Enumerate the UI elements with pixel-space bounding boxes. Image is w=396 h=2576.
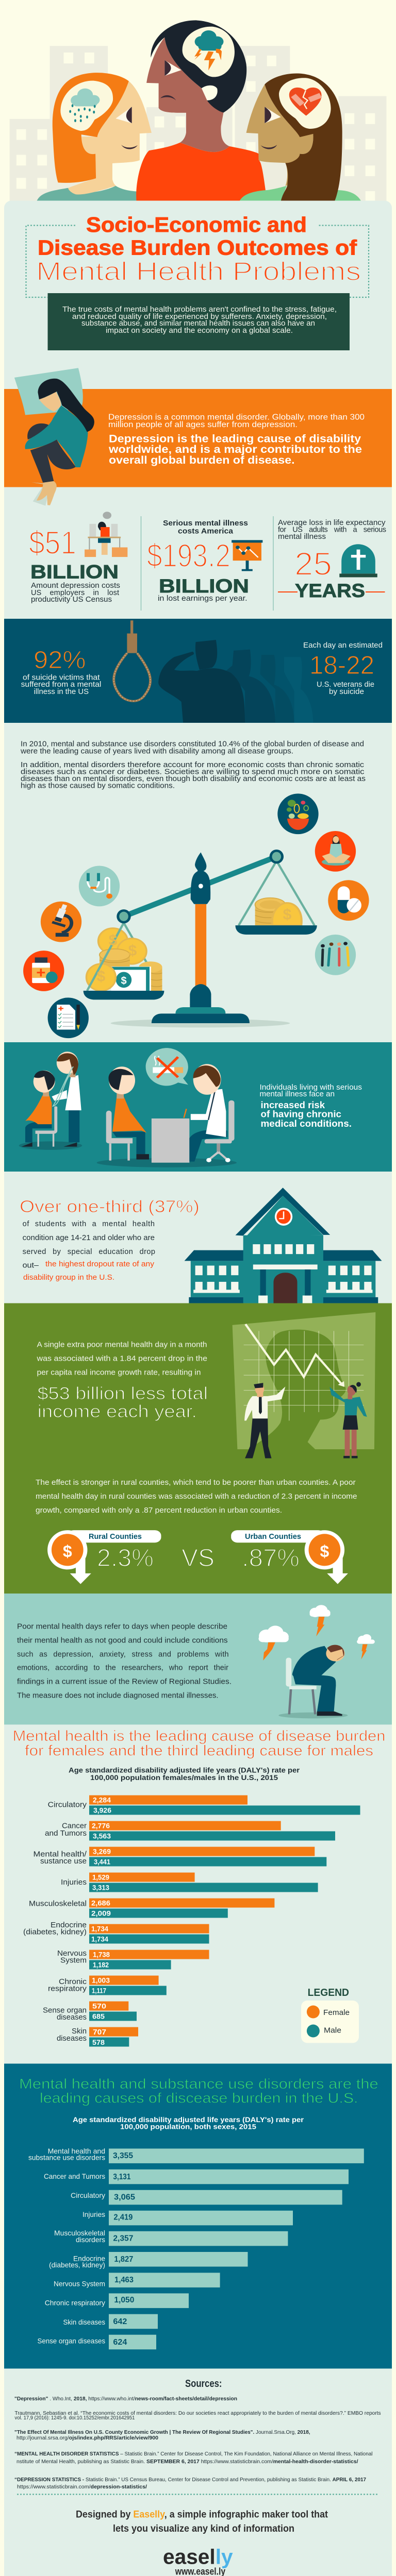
bar chart: DALYs by sex: Sense organ	[43, 2006, 87, 2014]
stat: 51 billion: Amount depression costs	[31, 582, 120, 590]
text block: global burden of disease: In 2010, mental and substance use disorders constituted 10.4% of the global burden of disease and	[21, 740, 364, 748]
depression text: Depression is the leading cause of disability	[109, 433, 361, 445]
poor mental health days text: such as depression, anxiety, stress and problems with	[17, 1651, 229, 1659]
stat: 25 years: 25	[294, 546, 332, 582]
chronic conditions band	[4, 1042, 392, 1172]
stat: 92 percent: of suicide victims that	[23, 673, 100, 682]
stat: 18-22 veterans: by suicide	[329, 687, 364, 696]
person: woman with brown hair	[239, 74, 361, 201]
rural urban text	[36, 1479, 357, 1515]
illustration: saluting soldier silhouettes	[158, 640, 313, 723]
bar chart: DALYs by sex: 570	[92, 2002, 106, 2010]
scale beam and post	[124, 852, 276, 1005]
stat: 193.2 billion: costs America	[178, 527, 234, 536]
bar chart: DALYs both sexes: Circulatory	[71, 2191, 105, 2199]
bar chart: DALYs by sex: 3,563	[93, 1832, 111, 1840]
bar chart: DALYs by sex: Skin	[72, 2027, 87, 2036]
stat: 193.2 billion: in lost earnings per year.	[158, 595, 248, 603]
illustration: doctor examining patient	[19, 1048, 237, 1167]
rural counties stat: Rural Counties	[89, 1532, 142, 1541]
bar chart: DALYs by sex: Chronic	[59, 1978, 87, 1986]
rural urban text: growth, compared with only a .87 percent reduction in urban counties.	[36, 1506, 282, 1515]
stat: 92 percent	[21, 647, 101, 696]
illustration: stressed man under storm clouds	[259, 1605, 375, 1718]
person: woman with orange hair	[37, 73, 159, 201]
bar chart: DALYs by sex: Mental health/	[33, 1851, 87, 1859]
sources list: "Depression" . Who.Int, 2018, https://www.who.int/news-room/fact-sheets/detail/depression	[14, 2396, 237, 2402]
stat: 193.2 billion: $193.2	[147, 538, 230, 574]
bar chart: DALYs by sex	[23, 1795, 360, 2046]
bar chart: DALYs by sex: and Tumors	[45, 1829, 87, 1838]
income band	[4, 1303, 392, 1594]
intro text box: The true costs of mental health problems aren't confined to the stress, fatigue,	[62, 306, 337, 314]
chart subtitle: both sexes	[73, 2115, 304, 2131]
stat: 92 percent: 92%	[34, 647, 86, 674]
illustration: balance scale with money and icons	[23, 793, 369, 1005]
depression text: Depression is a common mental disorder. Globally, more than 300	[108, 413, 365, 422]
stat: 193.2 billion	[147, 519, 262, 603]
icon: pill and capsule	[328, 880, 369, 921]
stat: 18-22 veterans: Each day an estimated	[303, 641, 383, 650]
bar chart: DALYs both sexes: 3,355	[113, 2151, 133, 2160]
bar chart: DALYs both sexes: 3,131	[113, 2173, 130, 2181]
divider lines	[141, 516, 273, 611]
bar chart: DALYs both sexes: 1,050	[114, 2296, 134, 2304]
depression text: overall global burden of disease.	[109, 454, 295, 466]
poor mental health days text: findings in a current issue of the Review of Regional Studies.	[17, 1678, 232, 1686]
bar chart: DALYs both sexes: 1,827	[114, 2255, 133, 2264]
income text	[36, 1341, 207, 1377]
stat: 18-22 veterans: 18-22	[309, 651, 374, 680]
bar chart: DALYs both sexes: Mental health and	[48, 2147, 105, 2155]
title block: Disease Burden Outcomes of	[38, 236, 357, 260]
student dropout text: Over one-third (37%)	[20, 1197, 200, 1216]
depression text	[108, 413, 365, 466]
icon: noose rope	[114, 620, 151, 701]
sources list: http://journal.srsa.org/ojs/index.php/RRS/article/view/900	[16, 2435, 158, 2441]
depression band	[4, 368, 392, 506]
person: woman in teal blouse	[329, 1382, 367, 1458]
bar chart: DALYs both sexes: Sense organ diseases	[37, 2337, 105, 2345]
chart subtitle: both sexes: 100,000 population, both sexes, 2015	[120, 2123, 256, 2131]
chart subtitle: females and males	[69, 1766, 300, 1782]
depression text: million people of all ages suffer from depression.	[108, 420, 298, 429]
person: man in white shirt	[244, 1383, 285, 1458]
bar chart: DALYs by sex: Endocrine	[51, 1921, 87, 1929]
sources list: vol. 17,9 (2016): 1245-9. doi:10.15252/embr.201642951	[14, 2415, 135, 2421]
bar chart: DALYs both sexes: 624	[113, 2338, 127, 2347]
bar chart: DALYs by sex: 1,734	[91, 1925, 108, 1933]
bar chart: DALYs by sex: 1,738	[93, 1951, 110, 1959]
income text: was associated with a 1.84 percent drop in the	[36, 1355, 207, 1363]
stat: 193.2 billion: Serious mental illness	[163, 519, 248, 528]
sources list: "The Effect Of Mental Illness On U.S. County Economic Growth | The Review Of Regional Studies". Journal.Srsa.Org, 2018,	[14, 2429, 310, 2435]
bar chart: DALYs both sexes: Cancer and Tumors	[44, 2172, 105, 2180]
stat: 25 years: for US adults with a serious	[278, 526, 386, 534]
bar chart: DALYs both sexes: Musculoskeletal	[54, 2229, 105, 2237]
sources list: nstitute of Mental Health, publishing as Statistic Brain. SEPTEMBER 6, 2017 https://www.statisticbrain.com/mental-health-disorder-statistics/	[16, 2459, 358, 2465]
stat: 51 billion: BILLION	[30, 561, 119, 582]
bar chart: DALYs by sex: 1,003	[92, 1976, 110, 1985]
legend: Female	[323, 2008, 350, 2017]
title block: Mental Health Problems	[36, 257, 361, 286]
scale base and clipboard icon	[48, 997, 290, 1038]
bar chart: DALYs by sex: 3,926	[93, 1806, 111, 1815]
bar chart: DALYs by sex: 3,313	[92, 1884, 109, 1892]
intro text box: impact on society and the economy on a global scale.	[106, 327, 293, 335]
stat: 25 years	[278, 519, 386, 601]
income text: A single extra poor mental health day in a month	[37, 1341, 207, 1349]
header illustration: three people with thought brains in front of city	[10, 20, 386, 201]
chronic conditions text: Individuals living with serious	[260, 1083, 362, 1092]
chronic conditions text: mental illness face an	[260, 1090, 335, 1098]
student dropout text: the highest dropout rate of any	[45, 1260, 155, 1268]
intro text box	[47, 293, 350, 350]
bar chart: DALYs by sex: Cancer	[62, 1822, 87, 1830]
sources list: “MENTAL HEALTH DISORDER STATISTICS – Statistic Brain.” Center for Disease Control, The Kim Foundation, National Alliance on Mental Illness, National	[14, 2451, 372, 2457]
student dropout text: condition age 14-21 and older who are	[23, 1234, 155, 1242]
stat: 51 billion: US employers in lost	[31, 589, 119, 597]
dollar signs on coins and bill	[97, 906, 292, 987]
footer: designed by easelly: lets you visualize any kind of information	[113, 2523, 294, 2534]
poor mental health days text: their mental health as not good and could include conditions	[17, 1637, 228, 1645]
poor mental health days band	[4, 1594, 392, 1724]
icon: group of friends	[315, 935, 356, 975]
left pan with coins and bill	[84, 909, 164, 999]
student dropout text: of students with a mental health	[23, 1220, 155, 1228]
bar chart: DALYs by sex: Nervous	[57, 1950, 87, 1958]
student dropout text: disability group in the U.S.	[23, 1274, 114, 1282]
chronic conditions text	[260, 1083, 362, 1129]
bar chart: DALYs by sex: System	[60, 1957, 87, 1965]
bar chart: DALYs by sex: 2,686	[91, 1899, 110, 1907]
bar chart: DALYs by sex: sustance use	[40, 1857, 87, 1866]
stat: 51 billion: $51	[29, 525, 76, 561]
intro text box: and reduced quality of life experienced by sufferers. Anxiety, depression,	[72, 313, 327, 321]
bar chart: DALYs both sexes: 642	[113, 2317, 127, 2326]
illustration: school building	[185, 1188, 382, 1303]
poor mental health days text: emotions, according to the researchers, who report their	[17, 1664, 228, 1672]
text block: global burden of disease: diseases than on mental disorders, even though both disability and economic costs are at least as	[21, 775, 366, 783]
legend	[301, 1987, 359, 2043]
income text: per capita real income growth rate, resulting in	[37, 1368, 201, 1377]
urban counties stat	[231, 1530, 348, 1584]
big stat: 53 billion less: income each year.	[37, 1402, 197, 1421]
icon: meditating woman	[315, 831, 356, 872]
stat: 51 billion	[29, 512, 127, 604]
dollar signs on coins and bill: $	[97, 968, 106, 985]
stat: 51 billion: productivity US Census	[31, 596, 112, 604]
bar chart: DALYs by sex: 1,117	[92, 1987, 106, 1995]
bar chart: DALYs by sex: 2,776	[92, 1822, 110, 1830]
bar chart: DALYs by sex: 685	[92, 2012, 105, 2021]
dollar signs on coins and bill: $	[109, 932, 118, 949]
icon: woman stressed at desk	[85, 512, 127, 557]
urban counties stat: Urban Counties	[245, 1532, 301, 1541]
bar chart: DALYs both sexes: Chronic respiratory	[45, 2299, 105, 2307]
icon: tombstone	[339, 544, 377, 577]
bar chart: DALYs by sex: respiratory	[48, 1985, 87, 1993]
footer: designed by easelly	[76, 2509, 328, 2534]
heading: leading causes in the U.S.	[19, 2076, 378, 2106]
bar chart: DALYs by sex: 3,269	[93, 1848, 111, 1856]
chronic conditions text: increased risk	[261, 1100, 325, 1110]
bar chart: DALYs both sexes: substance use disorders	[28, 2154, 105, 2162]
bar chart: DALYs both sexes: 3,065	[114, 2193, 135, 2202]
dollar signs on coins and bill: $	[121, 975, 127, 987]
bar chart: DALYs by sex: 2,284	[93, 1796, 111, 1804]
bar chart: DALYs by sex: diseases	[57, 2035, 87, 2043]
bar chart: DALYs by sex: 707	[93, 2028, 106, 2037]
bar chart: DALYs both sexes: 1,463	[114, 2276, 134, 2284]
chronic conditions text: medical conditions.	[261, 1118, 352, 1129]
student dropout text	[20, 1197, 200, 1282]
bar chart: DALYs both sexes: Nervous System	[54, 2280, 105, 2288]
legend: LEGEND	[308, 1987, 349, 1998]
icon: declining chart board	[232, 540, 262, 571]
bar chart: DALYs by sex: 2,009	[91, 1909, 111, 1918]
person: man with dark hair	[136, 20, 267, 201]
icon: no smoking speech bubble	[146, 1048, 188, 1086]
title block	[26, 213, 369, 297]
icon: microscope	[41, 902, 81, 942]
poor mental health days text: The measure does not include diagnosed mental illnesses.	[17, 1692, 219, 1700]
sources list: Sources:	[185, 2378, 222, 2389]
urban counties stat: $	[320, 1542, 329, 1561]
bar chart: DALYs both sexes: Skin diseases	[63, 2318, 105, 2326]
text block: global burden of disease: In addition, mental disorders therefore account for more economic costs than chronic somatic	[21, 761, 365, 769]
bar chart: DALYs by sex: 1,529	[92, 1873, 109, 1882]
rural urban text: mental health day in rural counties was associated with a reduction of 2.3 percent in income	[36, 1493, 357, 1501]
bar chart: DALYs by sex: 1,734	[91, 1935, 108, 1943]
chart subtitle: females and males: 100,000 population females/males in the U.S., 2015	[90, 1773, 278, 1782]
VS label: VS	[182, 1545, 214, 1572]
poor mental health days text: Poor mental health days refer to days when people describe	[17, 1623, 227, 1631]
stat: 92 percent: illness in the US	[34, 687, 89, 696]
bar chart: DALYs both sexes: disorders	[76, 2235, 105, 2244]
big stat: 53 billion less	[37, 1384, 208, 1421]
text block: global burden of disease: diseases such as cancer or diabetes. Societies are willing to spend much more on somatic	[21, 768, 365, 776]
bar chart: DALYs by sex: (diabetes, kidney)	[23, 1928, 87, 1936]
student dropout text: out–	[23, 1262, 39, 1270]
bar chart: DALYs both sexes: Endocrine	[73, 2255, 105, 2263]
dollar signs on coins and bill: $	[283, 906, 292, 923]
text block: global burden of disease: were the leading cause of years lived with disability among all disease groups.	[20, 747, 293, 755]
urban counties stat: .87%	[242, 1545, 300, 1572]
icon: clipboard and pen	[48, 997, 89, 1038]
bar chart: DALYs both sexes	[28, 2147, 364, 2349]
illustration: curled up girl on pillow	[14, 368, 94, 506]
stat: 193.2 billion: BILLION	[159, 575, 249, 597]
heading: leading cause for females and males: Mental health is the leading cause of disease burden	[12, 1728, 385, 1744]
stat: 18-22 veterans	[303, 641, 383, 696]
icon: stethoscope	[79, 866, 120, 906]
footer: designed by easelly: Designed by Easelly, a simple infographic maker tool that	[76, 2509, 328, 2520]
rural counties stat: 2.3%	[97, 1545, 154, 1572]
dollar signs on coins and bill: $	[128, 942, 137, 959]
rural urban text: The effect is stronger in rural counties, which tend to be poorer than urban counties. A poor	[36, 1479, 356, 1487]
big stat: 53 billion less: $53 billion less total	[37, 1384, 208, 1403]
chart subtitle: both sexes: Age standardized disability adjusted life years (DALY's) rate per	[73, 2115, 304, 2124]
stat: 25 years: mental illness	[278, 533, 326, 541]
heading: leading cause for females and males	[12, 1728, 385, 1759]
sources list: https://www.statisticbrain.com/depression-statistics/	[17, 2484, 147, 2490]
sources list: “DEPRESSION STATISTICS - Statistic Brain.” US Census Bureau, Center for Disease Control and Prevention, publishing as Statistic Brain. APRIL 6, 2017	[14, 2477, 366, 2483]
both sexes band	[4, 2064, 392, 2368]
icon: medicine bottle	[23, 951, 64, 991]
intro text box: substance abuse, and similar mental health issues can also have an	[81, 319, 315, 328]
stat: 25 years: Average loss in life expectancy	[278, 519, 386, 527]
chronic conditions text: of having chronic	[261, 1109, 341, 1119]
sources list	[14, 2378, 381, 2490]
right pan with coins	[235, 850, 317, 935]
chart subtitle: females and males: Age standardized disability adjusted life years (DALY's) rate per	[69, 1766, 300, 1774]
suicide band	[4, 619, 392, 723]
bar chart: DALYs both sexes: (diabetes, kidney)	[49, 2261, 105, 2269]
heading: leading cause for females and males: for females and the third leading cause for males	[25, 1742, 373, 1759]
heading: leading causes in the U.S.: Mental health and substance use disorders are the	[19, 2076, 378, 2092]
bar chart: DALYs both sexes: 2,419	[113, 2213, 133, 2222]
text block: global burden of disease	[20, 740, 366, 790]
stat: 25 years: YEARS	[295, 580, 365, 601]
rural counties stat: $	[63, 1542, 72, 1561]
bar chart: DALYs by sex: Musculoskeletal	[29, 1900, 87, 1908]
stat: 18-22 veterans: U.S. veterans die	[317, 680, 374, 689]
bar chart: DALYs by sex: Injuries	[61, 1878, 87, 1887]
logo: easelly: easelly	[163, 2545, 233, 2569]
bar chart: DALYs by sex: 3,441	[94, 1858, 110, 1866]
bar chart: DALYs by sex: 578	[92, 2038, 105, 2046]
bar chart: DALYs by sex: Circulatory	[48, 1801, 87, 1809]
bar chart: DALYs both sexes: 2,357	[113, 2234, 133, 2243]
text block: global burden of disease: high as those caused by somatic conditions.	[21, 782, 175, 790]
poor mental health days text	[17, 1623, 232, 1700]
sources list: Trautmann, Sebastian et al. “The economic costs of mental disorders: Do our societies react appropriately to the burden of mental disorders?.” EMBO reports	[14, 2410, 381, 2416]
illustration: falling chart with presenters	[233, 1312, 375, 1458]
title block: Socio-Economic and	[86, 213, 307, 236]
rural counties stat	[47, 1530, 161, 1584]
legend: Male	[324, 2026, 341, 2035]
bar chart: DALYs both sexes: Injuries	[82, 2210, 105, 2218]
heading: leading causes in the U.S.: leading causes of discease burden in the U.S.	[40, 2090, 358, 2106]
bar chart: DALYs by sex: 1,182	[93, 1961, 109, 1969]
main panel background	[4, 201, 392, 529]
depression text: worldwide, and is a major contributor to the	[108, 444, 362, 455]
student dropout text: served by special education drop	[23, 1248, 155, 1256]
stat: 92 percent: suffered from a mental	[21, 680, 101, 689]
icon: bowl of vegetables	[277, 793, 319, 834]
bar chart: DALYs by sex: diseases	[57, 2013, 87, 2022]
